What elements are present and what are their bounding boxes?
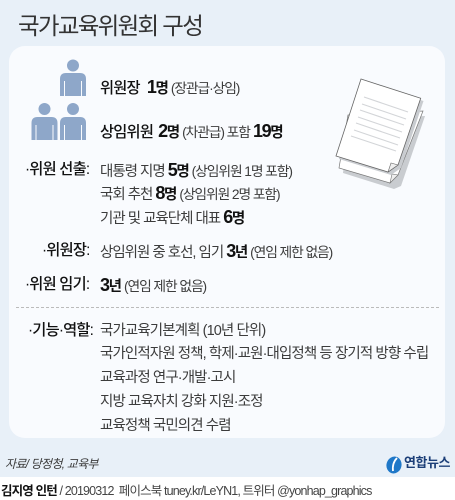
logo: Yonhap News	[386, 455, 450, 474]
selection lines	[100, 160, 292, 227]
term text: 3년 (연임 제한 없음)	[100, 275, 206, 295]
selection lines: 대통령 지명 5명 (상임위원 1명 포함)	[100, 160, 292, 180]
selection lines: 국회 추천 8명 (상임위원 2명 포함)	[100, 183, 280, 203]
roles list: 교육과정 연구·개발·고시	[100, 370, 235, 386]
chair row: 위원장 1명 (장관급·상임)	[100, 77, 239, 97]
icon: people	[32, 60, 86, 140]
standing members row: 상임위원 2명 (차관급) 포함 19명	[100, 120, 282, 140]
roles list	[100, 322, 428, 434]
title: 국가교육위원회 구성	[18, 13, 202, 39]
credit line: 김지영 인턴 / 20190312 페이스북 tuney.kr/LeYN1, 트위터 @yonhap_graphics	[1, 484, 371, 498]
selection lines: 기관 및 교육단체 대표 6명	[100, 207, 244, 227]
selection label: ·위원 선출:	[25, 160, 89, 178]
roles label: ·기능·역할:	[28, 322, 93, 339]
roles list: 지방 교육자치 강화 지원·조정	[100, 394, 263, 410]
logo: Yonhap News: 연합뉴스	[404, 455, 450, 470]
chair selection text: 상임위원 중 호선, 임기 3년 (연임 제한 없음)	[100, 240, 332, 260]
icon: documents	[336, 78, 425, 189]
roles list: 국가인적자원 정책, 학제·교원·대입정책 등 장기적 방향 수립	[100, 346, 428, 362]
roles list: 국가교육기본계획 (10년 단위)	[100, 323, 265, 339]
roles list: 교육정책 국민의견 수렴	[100, 418, 231, 434]
chair selection label: ·위원장:	[42, 242, 90, 258]
panel: composition	[9, 46, 445, 438]
source: 자료/ 당정청, 교육부	[5, 457, 98, 471]
term label: ·위원 임기:	[25, 276, 89, 293]
